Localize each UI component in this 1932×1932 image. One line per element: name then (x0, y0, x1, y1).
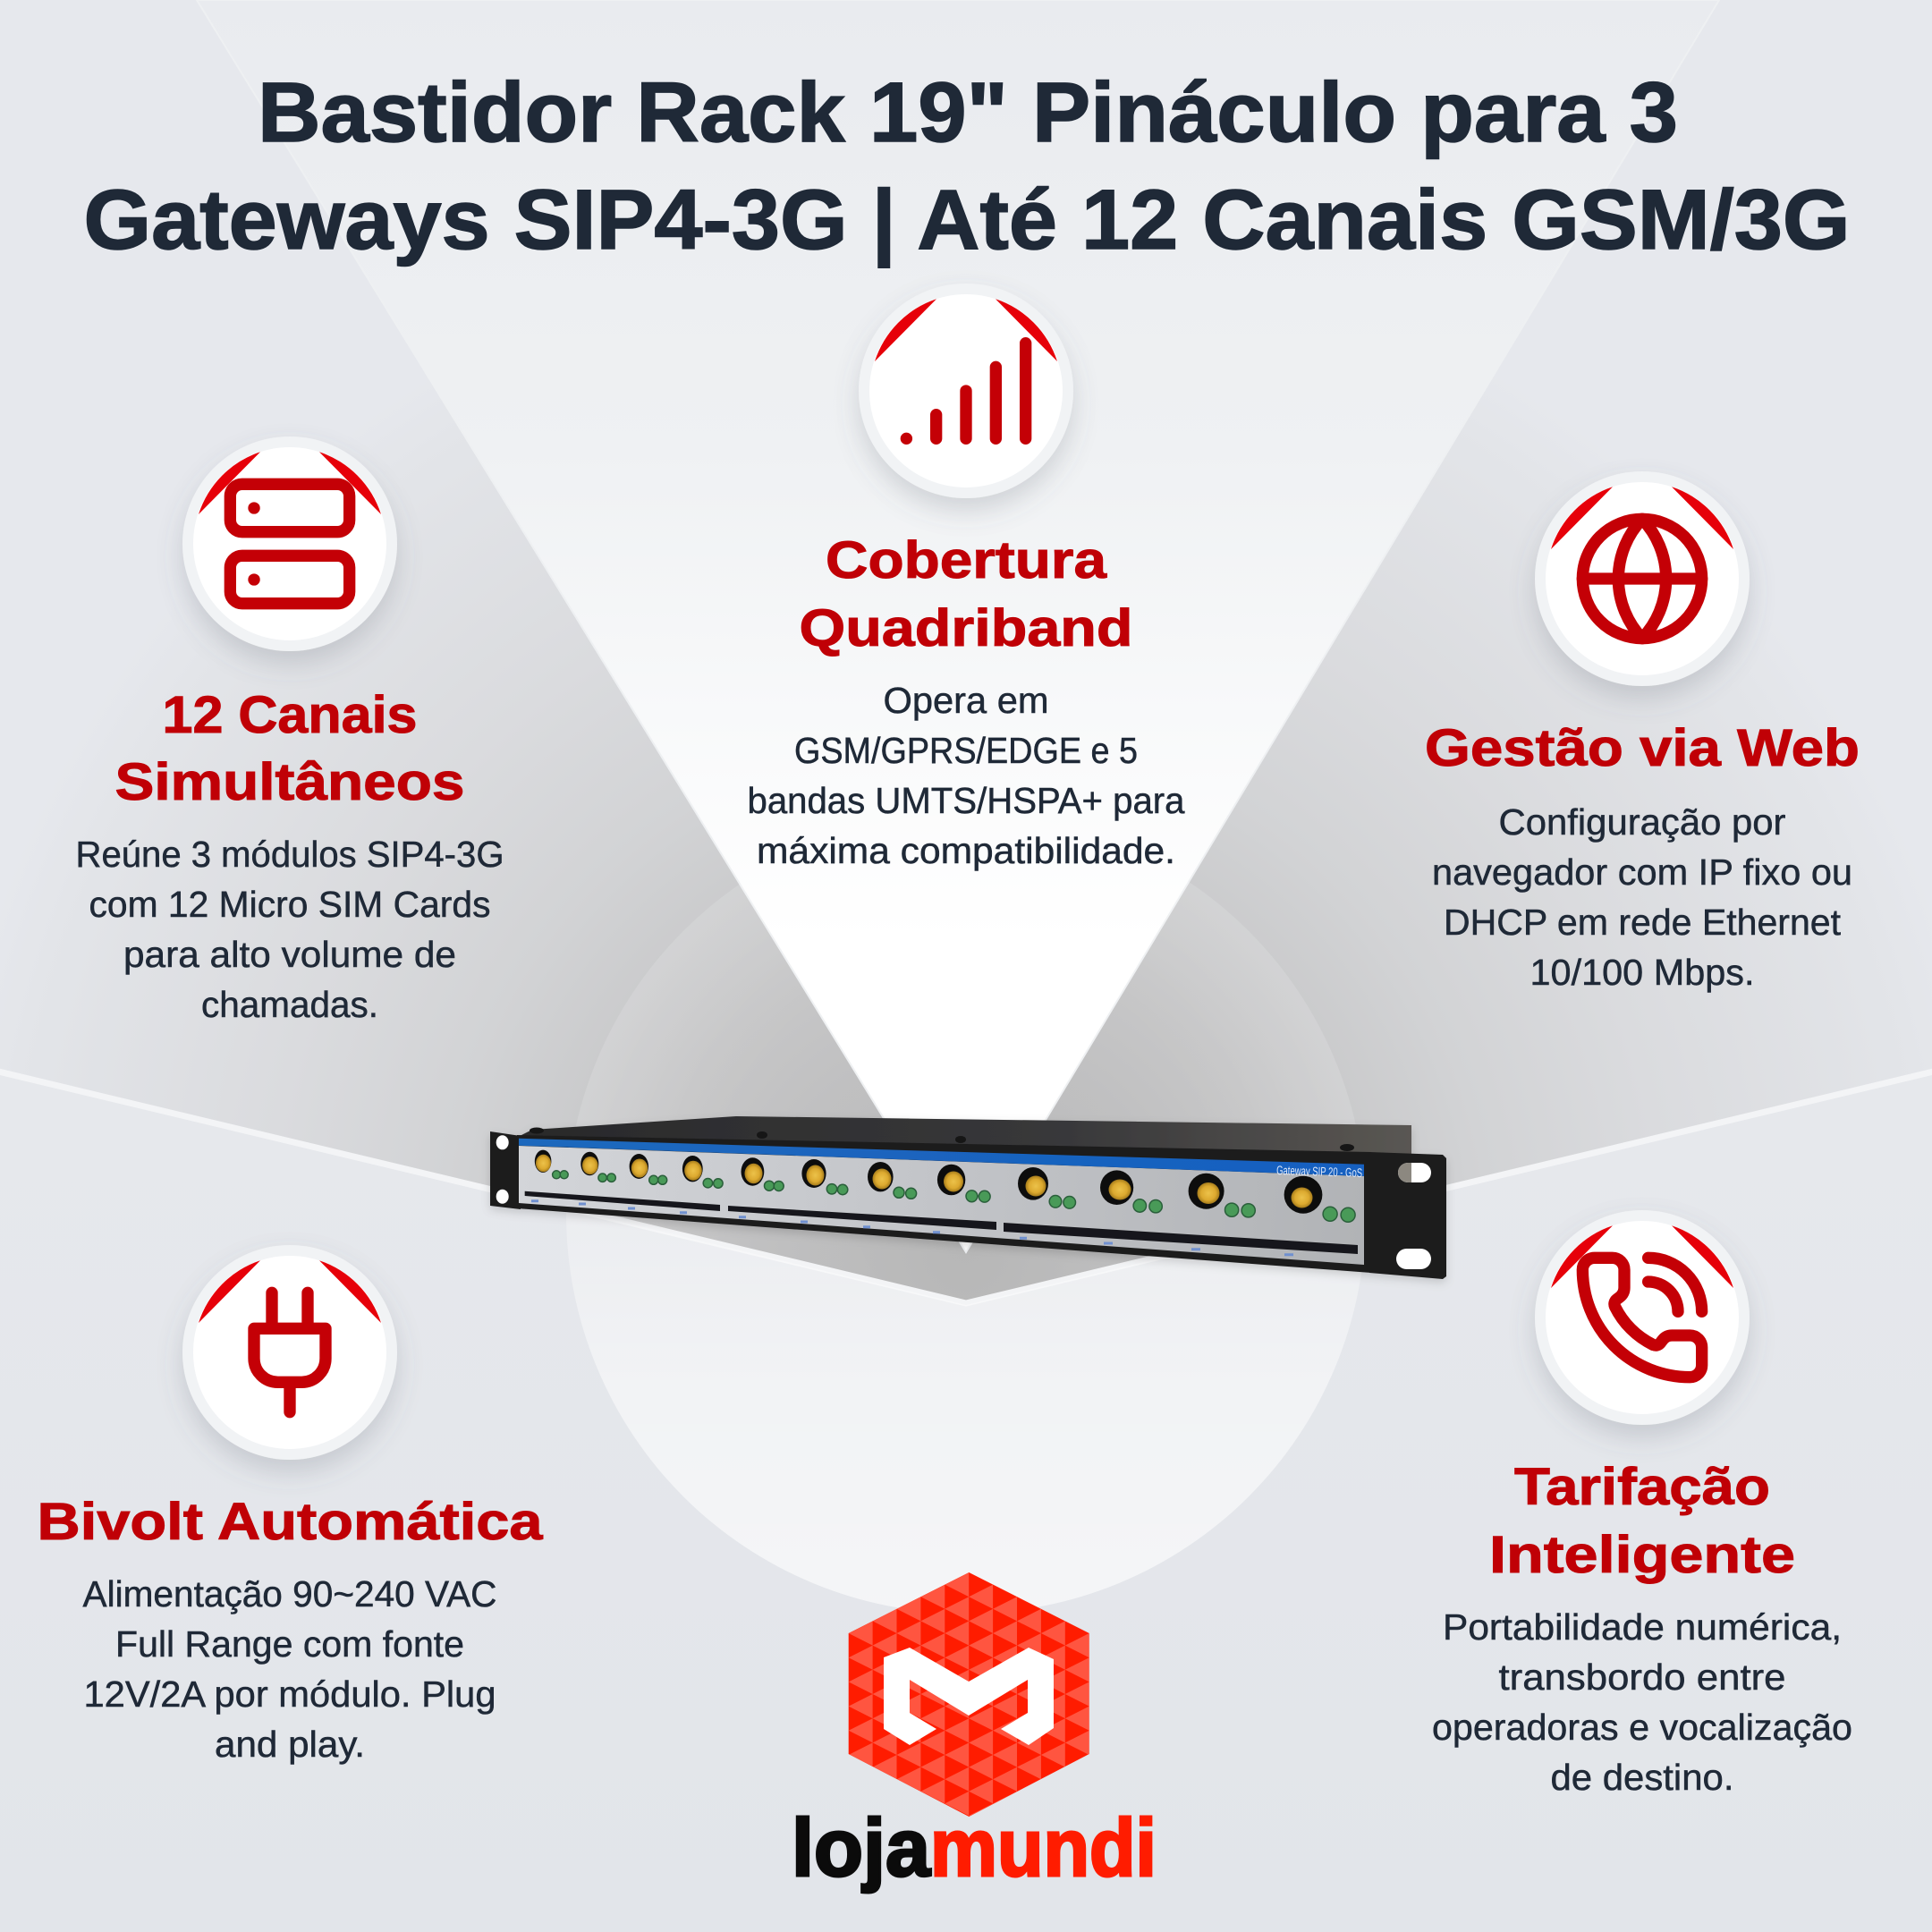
heading: Tarifação Inteligente: Inteligente (1489, 1526, 1795, 1584)
blue strip (519, 1139, 1364, 1176)
logo: lojamundi (796, 1572, 1152, 1894)
logo M mark (884, 1648, 1054, 1745)
text: Gestão description: 10/100 Mbps. (1530, 952, 1755, 993)
heading: Cobertura Quadriband: Quadriband (800, 599, 1132, 657)
left mounting ear (490, 1131, 521, 1209)
heading: 12 Canais Simultâneos (114, 686, 465, 811)
text: Cobertura description: Opera em (884, 680, 1048, 721)
text: Tarifação description: de destino. (1551, 1757, 1733, 1798)
background: translucent central circle (566, 814, 1366, 1614)
text: Tarifação description: transbordo entre (1499, 1657, 1785, 1698)
heading: Tarifação Inteligente (1489, 1458, 1795, 1584)
text: Bivolt description: 12V/2A por módulo. Plug (84, 1674, 496, 1715)
text: Bivolt description: Alimentação 90~240 VAC (82, 1573, 497, 1614)
panel: Cobertura Quadriband (748, 284, 1185, 871)
SIM slot labels (531, 1201, 1293, 1255)
text: Gestão description: DHCP em rede Ethernet (1444, 902, 1842, 943)
heading: Gestão via Web: Gestão via Web (1425, 719, 1860, 777)
text: Tarifação description (1432, 1606, 1852, 1798)
logo wordmark: mundi (930, 1803, 1157, 1894)
text: Tarifação description: operadoras e vocalização (1432, 1707, 1852, 1748)
background: central light wedge (197, 0, 1719, 1252)
text: 12 Canais description: com 12 Micro SIM Cards (89, 884, 490, 925)
text: Bivolt description (82, 1573, 497, 1765)
logo wordmark: loja (792, 1803, 931, 1894)
panel: Bivolt Automática (38, 1245, 543, 1765)
SIM card slots (525, 1191, 1358, 1254)
heading: Cobertura Quadriband (800, 531, 1132, 657)
background: circle inside chevron field (571, 1267, 1361, 1608)
panel: Gestão via Web (1425, 471, 1860, 993)
logo hexagon (848, 1572, 1089, 1817)
product photo: rack gateway (490, 1116, 1446, 1279)
icon: signal bars (859, 284, 1073, 498)
heading: Bivolt Automática: Bivolt Automática (38, 1493, 543, 1551)
text: Gestão description (1432, 801, 1852, 993)
text: Bivolt description: Full Range com fonte (115, 1623, 464, 1665)
text: 12 Canais description: para alto volume de (123, 934, 456, 975)
heading: 12 Canais Simultâneos: Simultâneos (114, 753, 465, 811)
text: 12 Canais description (75, 834, 504, 1025)
status LEDs (553, 1171, 1355, 1222)
text: Gestão description: Configuração por (1499, 801, 1785, 843)
heading: 12 Canais Simultâneos: 12 Canais (163, 686, 417, 744)
text: Cobertura description: GSM/GPRS/EDGE e 5 (794, 730, 1138, 771)
title: Gateways SIP4-3G | Até 12 Canais GSM/3G (84, 173, 1850, 267)
icon: phone call (1535, 1210, 1750, 1425)
device label: Gateway SIP 20 - GoS (1276, 1163, 1362, 1180)
title: Bastidor Rack 19" Pináculo para 3 (258, 65, 1678, 160)
panel: Tarifação Inteligente (1432, 1210, 1852, 1798)
text: Cobertura description: máxima compatibilidade. (757, 830, 1175, 871)
panel: 12 Canais Simultâneos (75, 436, 504, 1025)
background: lower chevron field (0, 1070, 1932, 1932)
right mounting ear (1369, 1152, 1446, 1279)
text: Cobertura description: bandas UMTS/HSPA+ para (748, 780, 1185, 821)
text: Gestão description: navegador com IP fixo ou (1432, 852, 1852, 893)
title (84, 65, 1850, 267)
icon: plug (182, 1245, 397, 1460)
text: 12 Canais description: Reúne 3 módulos SIP4-3G (75, 834, 504, 875)
text: Bivolt description: and play. (215, 1724, 365, 1765)
top cover (520, 1116, 1411, 1156)
logo wordmark (792, 1803, 1157, 1894)
text: Tarifação description: Portabilidade numérica, (1443, 1606, 1842, 1648)
text: Cobertura description (748, 680, 1185, 871)
SMA antenna connectors (535, 1150, 1322, 1214)
icon: globe (1535, 471, 1750, 686)
screws on top edge (530, 1127, 1354, 1151)
silver faceplate (519, 1146, 1364, 1265)
front panel frame (517, 1135, 1371, 1273)
heading: Tarifação Inteligente: Tarifação (1514, 1458, 1770, 1516)
heading: Cobertura Quadriband: Cobertura (826, 531, 1107, 589)
icon: server (182, 436, 397, 651)
text: 12 Canais description: chamadas. (201, 984, 378, 1025)
